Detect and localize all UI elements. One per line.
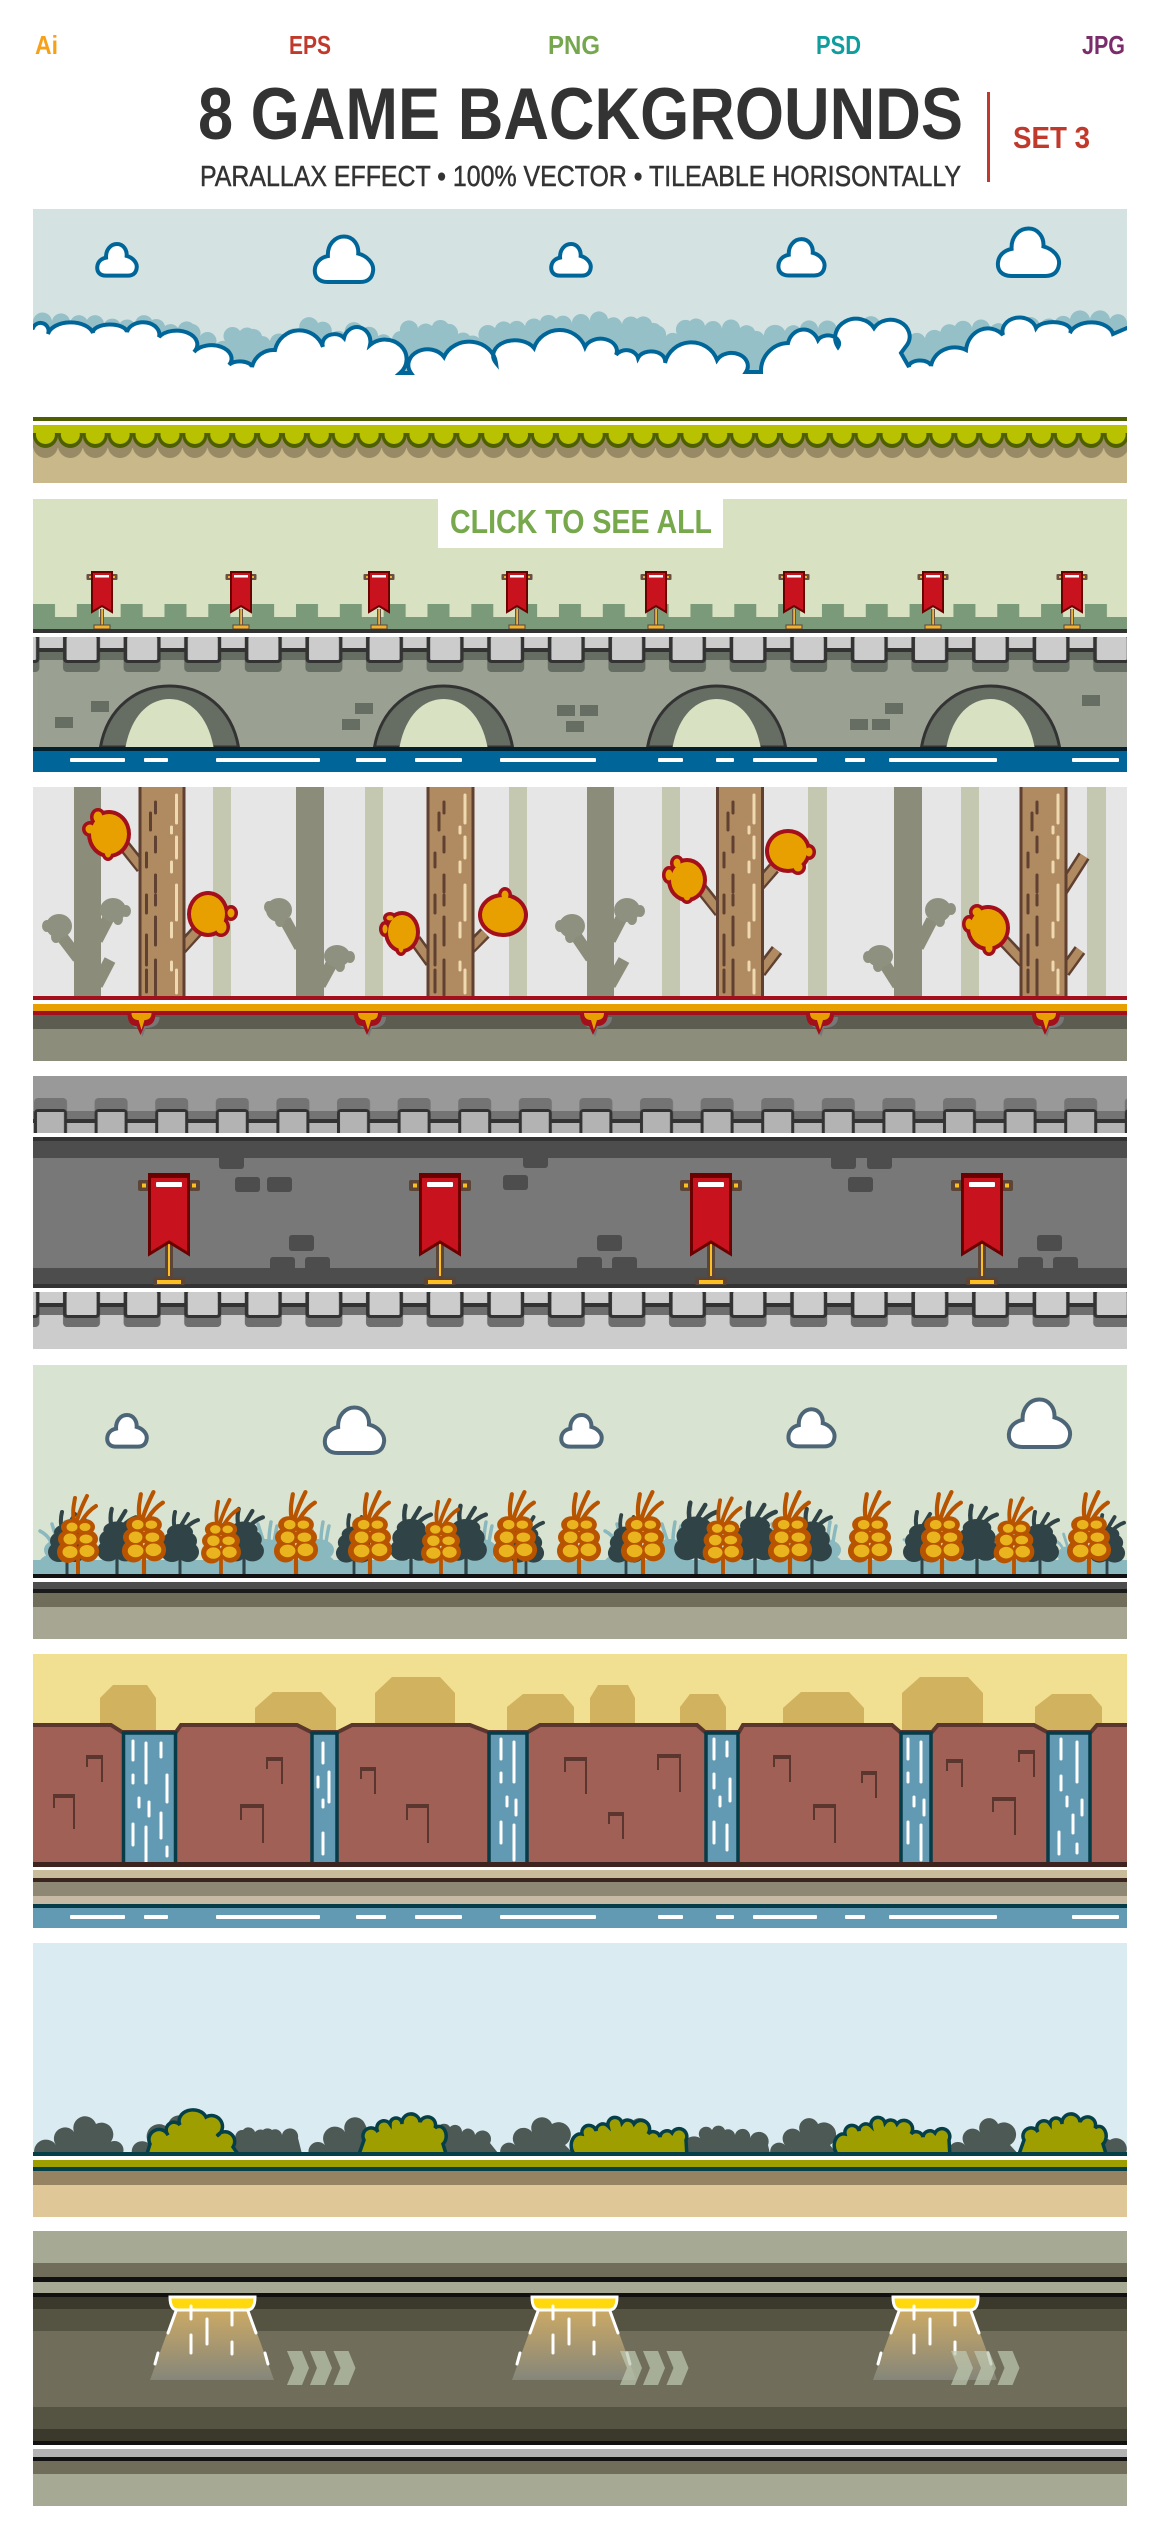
pale background trees: [213, 787, 1106, 996]
lamp 1: [150, 2297, 274, 2380]
distant mesas: [100, 1677, 1102, 1735]
front white cloud layer: [20, 317, 1140, 425]
earth layers: [33, 2152, 1127, 2217]
ground layers: [33, 1574, 1127, 1639]
bricks: [219, 1155, 1078, 1271]
pale plants: [38, 1520, 1072, 1560]
subtitle: PARALLAX EFFECT • 100% VECTOR • TILEABLE HORISONTALLY: [200, 161, 961, 193]
panel 2: castle bridge: [33, 499, 1127, 772]
panel 1: sky and clouds: [20, 209, 1140, 483]
waterfall streaks: [133, 1739, 1082, 1862]
olive foreground bushes: [146, 2110, 1107, 2157]
wheat stalks: [57, 1492, 1111, 1574]
lamp 2: [512, 2297, 636, 2380]
icon: small clouds: [97, 229, 1059, 282]
format label: PSD: PSD: [816, 30, 861, 60]
panel 5: wheat field: [33, 1365, 1127, 1639]
teal ground band: [33, 1560, 1127, 1574]
front trees with branches: [122, 787, 1084, 996]
river: [33, 747, 1127, 772]
chevron arrows 3: [951, 2351, 1020, 2385]
canyon ground layers: [33, 1862, 1127, 1928]
grey mid trees: [42, 787, 956, 996]
large red flags: [138, 1173, 1013, 1285]
panel 3: autumn forest: [33, 787, 1127, 1061]
back cloud bank: [33, 310, 1127, 371]
set divider: [987, 92, 990, 182]
panel 6: canyon waterfalls: [25, 1654, 1135, 1928]
waterfalls: [124, 1733, 1090, 1864]
panel 8: tunnel: [33, 2231, 1127, 2506]
interior wall: [33, 1137, 1127, 1292]
upper battlement: [33, 1076, 1127, 1137]
format label: EPS: EPS: [289, 30, 331, 60]
tunnel layers: [33, 2231, 1127, 2506]
dark background bushes: [34, 2115, 1127, 2158]
chevron arrows 1: [287, 2351, 356, 2385]
lamp 3: [873, 2297, 997, 2380]
format label: Ai: Ai: [35, 30, 58, 60]
cliff cracks: [53, 1751, 1035, 1843]
red flags: [86, 572, 1088, 629]
grass ground: [33, 417, 1127, 483]
lower battlement: [33, 1292, 1127, 1349]
click to see all button: [438, 499, 723, 548]
bricks: [55, 695, 1100, 732]
arches: [100, 686, 1060, 747]
panel 4: castle interior: [33, 1076, 1127, 1349]
title: 8 GAME BACKGROUNDS: [198, 74, 963, 155]
back castle wall: [33, 604, 1127, 629]
stone wall: [33, 629, 1127, 747]
format label: PNG: PNG: [548, 30, 600, 60]
forest ground: [33, 996, 1127, 1061]
orange drips: [128, 1013, 1064, 1037]
orange leaf clusters: [82, 808, 1010, 956]
panel 7: bushes: [33, 1943, 1127, 2217]
click to see all button: CLICK TO SEE ALL: [450, 503, 712, 540]
chevron arrows 2: [620, 2351, 688, 2385]
format label: JPG: JPG: [1082, 30, 1125, 60]
dark plants: [48, 1503, 1125, 1574]
set label: SET 3: [1013, 120, 1090, 155]
cliffs: [25, 1725, 1135, 1865]
icon: clouds: [107, 1400, 1070, 1453]
